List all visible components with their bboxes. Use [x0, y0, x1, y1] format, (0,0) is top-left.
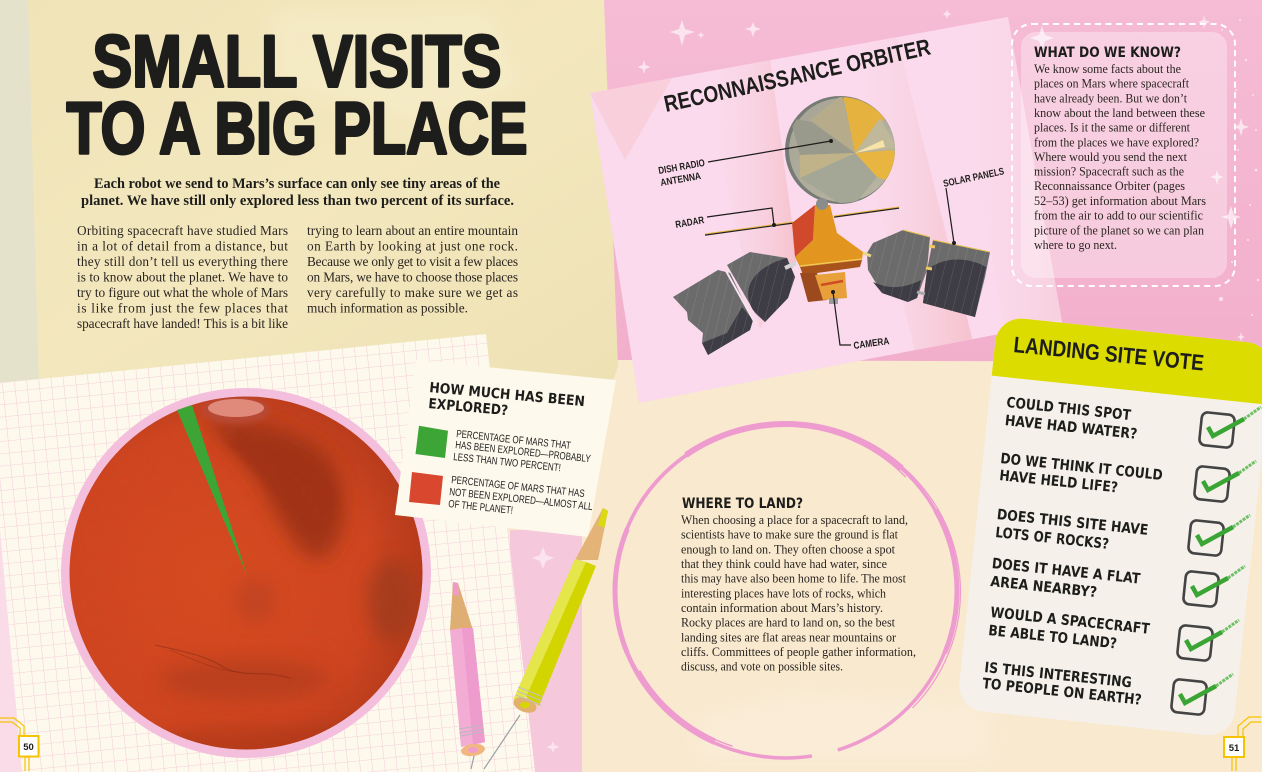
icon: pink pencil: [450, 582, 520, 769]
icon: checkbox 6: [1171, 674, 1233, 715]
body text column 2: [307, 223, 518, 316]
title: SMALL VISITS: [92, 22, 502, 102]
icon: checkbox 2: [1194, 461, 1256, 502]
left solar panels: [673, 252, 796, 355]
heading: WHAT DO WE KNOW?: [1034, 45, 1181, 61]
question 1: HAVE HAD WATER?: [1004, 413, 1138, 443]
body text column 2: much information as possible.: [307, 300, 468, 316]
heading: WHERE TO LAND?: [682, 496, 803, 512]
right solar panels: [863, 230, 990, 317]
legend heading: HOW MUCH HAS BEEN: [429, 380, 585, 410]
intro text: [81, 176, 514, 209]
label: camera: CAMERA: [853, 336, 890, 352]
red legend text: [448, 474, 593, 517]
polar ice cap: [202, 396, 270, 424]
question 4: AREA NEARBY?: [990, 574, 1098, 601]
label: camera: [831, 290, 890, 352]
spacecraft body: [792, 205, 863, 304]
legend card: [395, 360, 616, 537]
card heading: LANDING SITE VOTE: [1013, 332, 1205, 376]
panel: reconnaissance orbiter sheet: [590, 17, 1062, 403]
page number 50: 50: [23, 742, 34, 753]
panel: grid paper: [0, 334, 535, 772]
satellite dish: [785, 90, 900, 210]
icon: checkbox 4: [1183, 566, 1245, 607]
body text: We know some facts about the: [1034, 61, 1181, 76]
question 1: [1004, 395, 1138, 443]
label: dish radio antenna: [658, 139, 833, 189]
green legend text: [453, 428, 591, 474]
body text: [681, 512, 916, 674]
question 6: [982, 660, 1142, 709]
red legend text: OF THE PLANET!: [448, 498, 514, 517]
label: radar: RADAR: [675, 215, 706, 231]
painted ring: [614, 424, 960, 760]
body text: mission? Spacecraft such as the: [1034, 164, 1184, 179]
icon: checkbox 1: [1199, 407, 1261, 448]
page number 51: 51: [1229, 743, 1240, 754]
planet Mars: [70, 396, 422, 750]
body text column 2: Because we only get to visit a few places: [307, 254, 518, 269]
body text: interesting places have lots of rocks, which: [681, 585, 886, 600]
red legend text: PERCENTAGE OF MARS THAT HAS: [451, 474, 585, 500]
question 6: TO PEOPLE ON EARTH?: [982, 676, 1142, 709]
body text: this may have also been home to life. The most: [681, 571, 906, 586]
icon: checkbox 3: [1188, 515, 1250, 556]
body text column 1: is like from just the few places that: [77, 300, 288, 316]
panel: landing site vote card: [957, 316, 1262, 738]
body text: 52–53) get information about Mars: [1034, 193, 1206, 208]
body text: that they think could have had water, since: [681, 556, 887, 571]
body text: picture of the planet so we can plan: [1034, 222, 1204, 237]
body text column 1: Orbiting spacecraft have studied Mars: [77, 223, 288, 238]
question 3: LOTS OF ROCKS?: [995, 525, 1110, 553]
body text: where to go next.: [1034, 237, 1117, 252]
body text column 1: in a lot of detail from a distance, but: [77, 238, 288, 254]
intro text: Each robot we send to Mars’s surface can only see tiny areas of the: [94, 176, 500, 192]
label: radar: [675, 208, 776, 231]
body text column 1: spacecraft have landed! This is a bit like: [77, 316, 288, 331]
question 5: BE ABLE TO LAND?: [988, 623, 1118, 652]
question 4: [990, 556, 1141, 601]
body text: from the places we have explored?: [1034, 134, 1199, 149]
body text: have already been. But we don’t: [1034, 90, 1187, 105]
panel: where to land: [614, 424, 960, 760]
body text: [1034, 61, 1206, 252]
body text: cliffs. Committees of people gather information,: [681, 644, 916, 659]
sheet folds: [590, 60, 1062, 350]
body text column 2: on Earth by looking at just one rock.: [307, 238, 518, 254]
body text: scientists have to make sure the ground is flat: [681, 527, 898, 542]
green legend text: LESS THAN TWO PERCENT!: [453, 451, 561, 474]
red legend text: NOT BEEN EXPLORED—ALMOST ALL: [449, 486, 593, 513]
body text: places. Is it the same or different: [1034, 120, 1190, 135]
body text column 1: try to figure out what the whole of Mars: [77, 285, 288, 300]
green legend swatch: [416, 426, 448, 458]
body text: When choosing a place for a spacecraft to land,: [681, 512, 908, 527]
green explored wedge: [177, 405, 247, 575]
question 2: DO WE THINK IT COULD: [1000, 451, 1163, 484]
body text: Reconnaissance Orbiter (pages: [1034, 178, 1185, 193]
question 4: DOES IT HAVE A FLAT: [991, 556, 1141, 588]
sheet title: RECONNAISSANCE ORBITER: [662, 33, 933, 117]
body text column 1: [77, 223, 288, 331]
question 5: [988, 605, 1150, 652]
body text column 1: is to know about the planet. We have to: [77, 270, 288, 284]
body text: contain information about Mars’s history.: [681, 600, 883, 615]
body text: Rocky places are hard to land on, so the best: [681, 615, 895, 630]
title: TO A BIG PLACE: [66, 88, 528, 170]
body text: places on Mars where spacecraft: [1034, 76, 1189, 91]
label: solar panels: SOLAR PANELS: [942, 166, 1006, 190]
page number 51: [1224, 717, 1261, 771]
question 2: [999, 451, 1163, 496]
diagram: orbiter spacecraft: [673, 90, 990, 355]
page number 50: [0, 718, 38, 771]
intro text: planet. We have still only explored less than two percent of its surface.: [81, 193, 514, 209]
body text: know about the land between these: [1034, 105, 1205, 120]
body text: Where would you send the next: [1034, 149, 1187, 164]
body text column 2: very carefully to make sure we get as: [307, 285, 518, 300]
body text column 1: they still don’t tell us everything there: [77, 254, 288, 269]
question 2: HAVE HELD LIFE?: [999, 468, 1119, 496]
body text column 2: trying to learn about an entire mountain: [307, 223, 518, 238]
green legend text: HAS BEEN EXPLORED—PROBABLY: [455, 439, 591, 465]
green legend text: PERCENTAGE OF MARS THAT: [456, 428, 572, 452]
body text: from the air to add to our scientific: [1034, 208, 1203, 223]
question 3: DOES THIS SITE HAVE: [996, 507, 1149, 539]
Mars pie chart: [60, 388, 440, 765]
question 3: [995, 507, 1149, 553]
body text: landing sites are flat areas near mountains or: [681, 629, 897, 644]
icon: checkbox 5: [1177, 620, 1239, 661]
body text: enough to land on. They often choose a spot: [681, 541, 895, 556]
panel: what do we know: [1012, 24, 1235, 286]
legend heading: EXPLORED?: [428, 396, 509, 419]
body text: discuss, and vote on possible sites.: [681, 659, 843, 674]
title: [66, 22, 528, 170]
label: dish radio antenna: DISH RADIO: [658, 158, 706, 177]
label: dish radio antenna: ANTENNA: [660, 171, 702, 189]
halo around Mars: [61, 388, 431, 758]
radar bar: [705, 208, 899, 235]
question 1: COULD THIS SPOT: [1006, 395, 1132, 424]
body text column 2: on Mars, we have to choose those places: [307, 270, 518, 284]
question 6: IS THIS INTERESTING: [984, 660, 1132, 691]
icon: yellow pencil: [511, 508, 608, 716]
red legend swatch: [409, 472, 443, 505]
question 5: WOULD A SPACECRAFT: [990, 605, 1150, 638]
star decorations: [532, 9, 1259, 753]
label: solar panels: [942, 166, 1006, 245]
